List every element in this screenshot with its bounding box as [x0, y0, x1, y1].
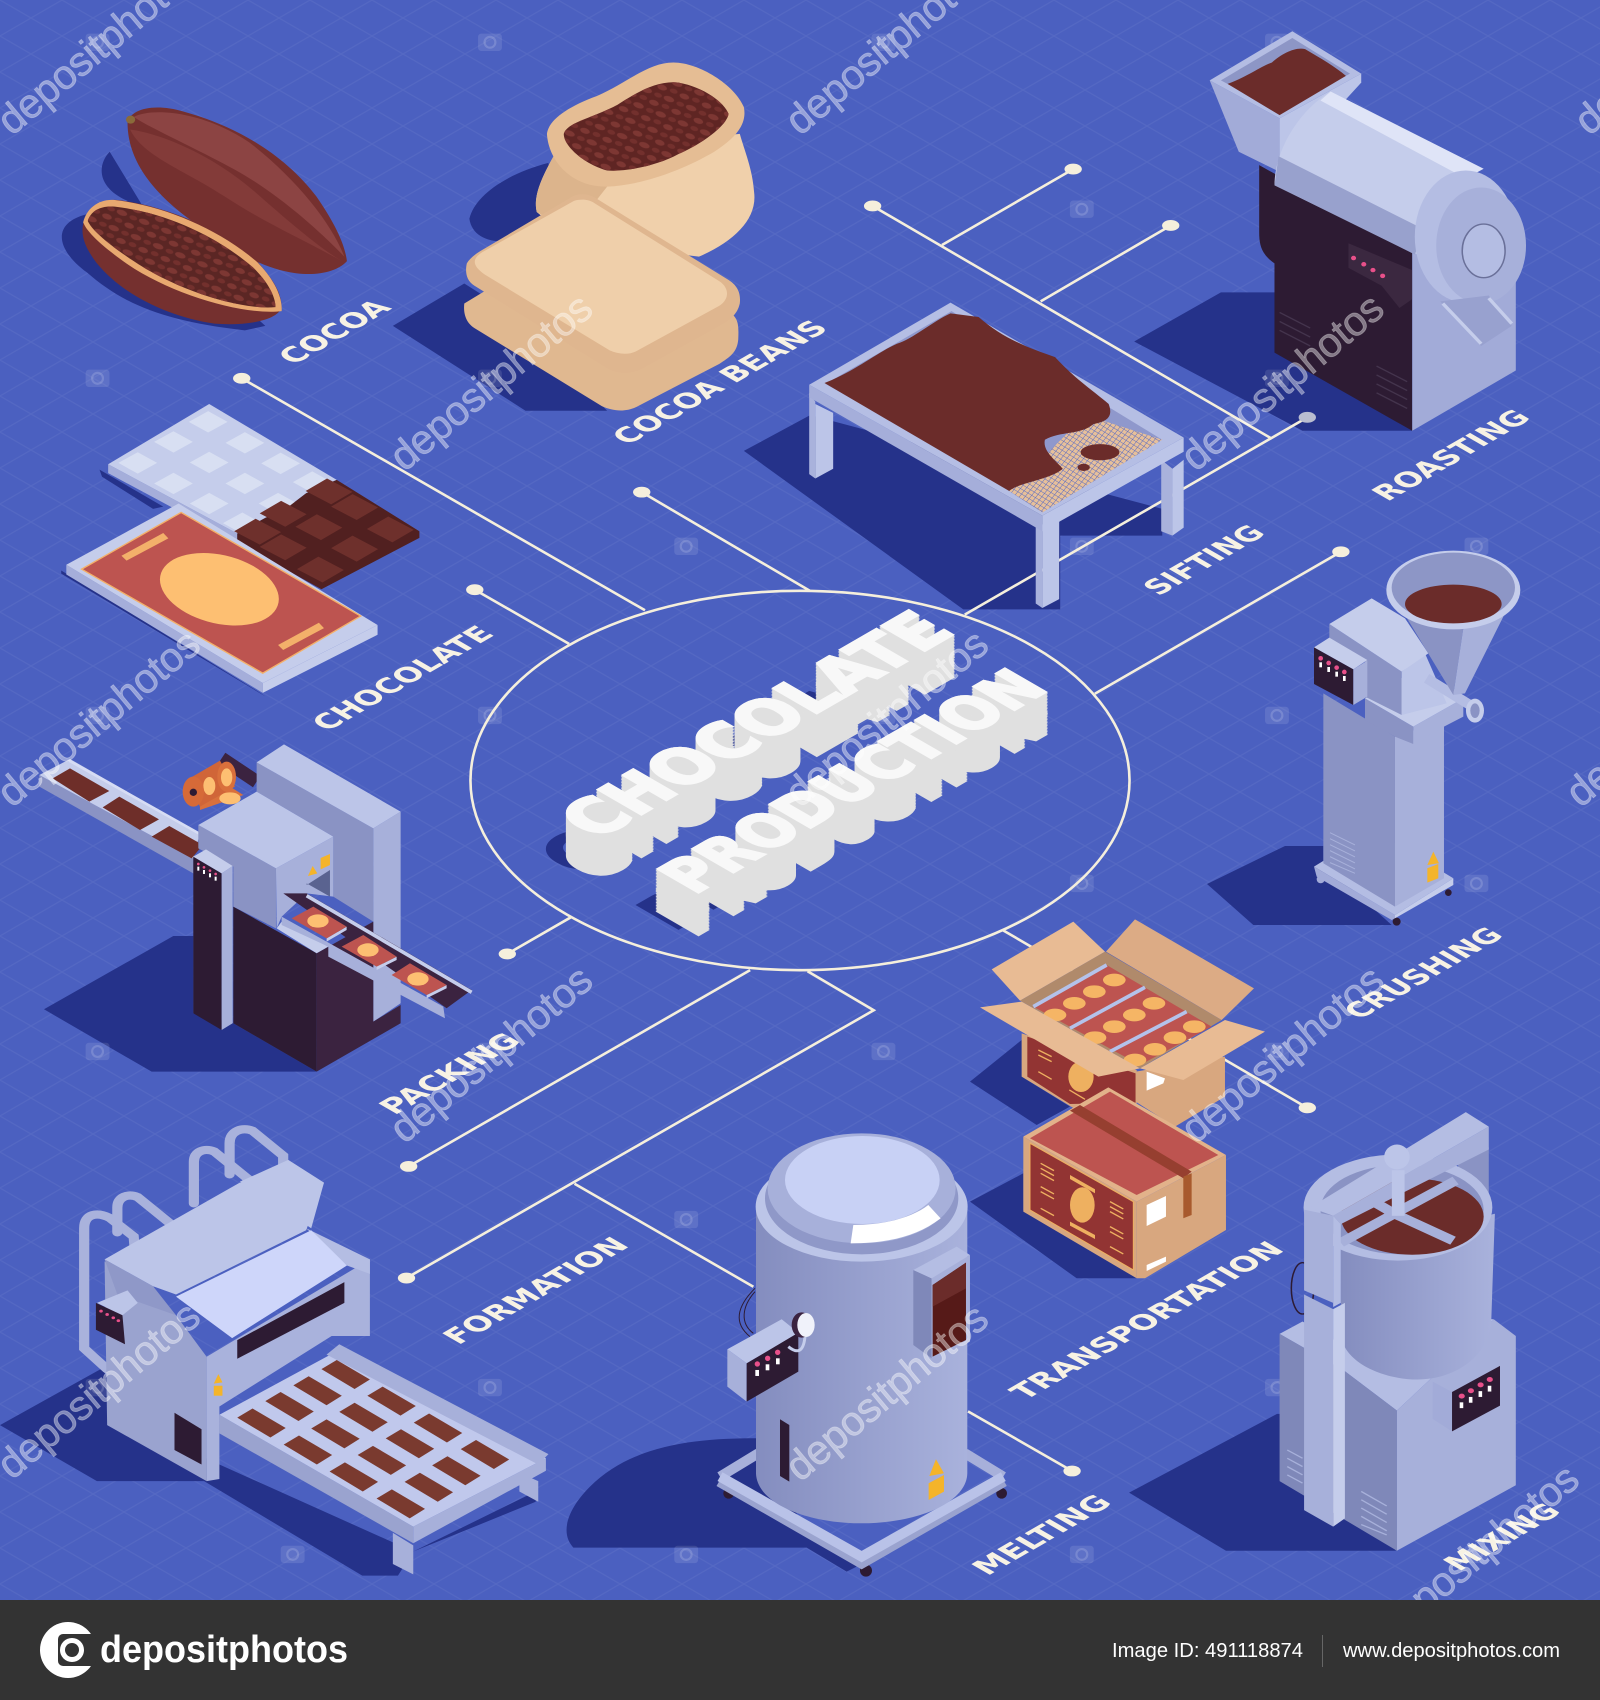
label: mixing: MIXING — [1436, 1499, 1568, 1575]
icon: melting tank — [720, 1133, 1007, 1577]
table tray with mesh — [809, 303, 1184, 531]
stock watermarks: depositphotos — [1172, 284, 1392, 480]
label: formation: FORMATION — [435, 1233, 636, 1349]
footer logo text: depositphotos — [100, 1629, 348, 1671]
central title: chocolate production: PRODUCTION — [644, 660, 1064, 903]
label: transportation: TRANSPORTATION — [1002, 1237, 1292, 1404]
website: www.depositphotos.com — [1342, 1640, 1560, 1662]
stock watermarks: depositphotos — [776, 1294, 997, 1490]
dark machine body — [233, 907, 401, 1072]
flowchart connector lines and central ring — [233, 164, 1350, 1476]
icon: transportation boxes — [980, 919, 1265, 1278]
tank body — [756, 1207, 967, 1523]
grinder base and wheels — [1314, 830, 1453, 926]
central title: chocolate production — [543, 601, 1064, 903]
wrapped chocolate bar — [66, 504, 378, 693]
icon: crushing machine — [1314, 551, 1520, 926]
infeed conveyor with bars — [39, 759, 200, 873]
grinder funnel — [1386, 551, 1520, 695]
machine body — [105, 1228, 370, 1481]
icon: chocolate bars — [66, 404, 419, 693]
grinder outlet pipe — [1427, 678, 1484, 723]
open cocoa pod with beans — [83, 200, 282, 324]
label: cocoa: COCOA — [270, 295, 399, 369]
mixer control panel — [1433, 1366, 1500, 1431]
grinder column — [1323, 693, 1444, 907]
warning signs — [929, 1459, 944, 1500]
icon: mixing machine — [1280, 1112, 1516, 1551]
mixer base — [1280, 1315, 1516, 1551]
label: roasting: ROASTING — [1364, 405, 1538, 505]
cables — [1291, 1263, 1314, 1314]
stock watermarks: depositphotos — [1367, 1455, 1588, 1650]
rear pillar — [1458, 1147, 1489, 1216]
conveyor table with bars — [219, 1344, 548, 1574]
label: cocoa beans: COCOA BEANS — [604, 315, 836, 449]
hopper and hood — [105, 1160, 347, 1338]
footer bar — [0, 1600, 1600, 1700]
roaster dark body — [1259, 165, 1516, 431]
roaster drum — [1274, 92, 1526, 304]
tank trolley frame — [720, 1453, 1007, 1577]
control column — [193, 849, 233, 1030]
unwrapped chocolate bar — [108, 404, 419, 589]
icon: packing machine — [39, 744, 472, 1072]
stock watermarks: depositphotos — [1172, 956, 1392, 1152]
closed stacked sacks — [464, 194, 740, 410]
closed box — [1023, 1087, 1226, 1278]
open box — [980, 919, 1265, 1127]
cast shadows of all objects — [0, 152, 1412, 1576]
stock watermarks: depositphotos — [381, 956, 601, 1152]
process labels — [270, 295, 1568, 1580]
mixer column and arch — [1304, 1112, 1489, 1527]
whole cocoa pod — [126, 108, 347, 274]
wrapper rolls — [183, 758, 257, 810]
decorative camera marks — [86, 34, 1488, 1563]
cocoa mass on sieve — [824, 313, 1119, 491]
label: packing: PACKING — [371, 1028, 528, 1119]
mixer tank — [1304, 1154, 1495, 1380]
icon: cocoa beans sacks — [464, 62, 754, 410]
icon: cocoa pods — [83, 108, 347, 324]
tank window — [913, 1247, 970, 1358]
grinder control panel — [1314, 638, 1367, 705]
tank control box and gauge — [727, 1312, 815, 1402]
tank lid — [756, 1133, 968, 1262]
pipes — [84, 1129, 283, 1369]
label: melting: MELTING — [964, 1490, 1119, 1580]
label: chocolate: CHOCOLATE — [304, 621, 501, 735]
icon: roasting machine — [1210, 31, 1526, 431]
icon: formation machine — [84, 1129, 548, 1574]
cables — [739, 1288, 755, 1337]
roaster chute — [1440, 296, 1512, 346]
footer logo icon — [40, 1622, 96, 1678]
stock watermarks: depositphotos — [776, 620, 997, 816]
central title: chocolate production: CHOCOLATE — [543, 601, 971, 849]
machine head — [198, 792, 333, 953]
icon: sifting table — [809, 303, 1184, 608]
label: crushing: CRUSHING — [1336, 923, 1511, 1024]
control panel — [96, 1290, 138, 1344]
table legs — [809, 393, 1184, 608]
roaster hopper — [1210, 31, 1361, 172]
back tower — [257, 744, 401, 1022]
tank slot — [780, 1419, 789, 1482]
image id: Image ID: 491118874 — [1112, 1640, 1303, 1662]
grinder shelf — [1365, 672, 1463, 744]
stock watermarks: depositphotos — [381, 284, 601, 480]
outfeed conveyor with packages — [282, 893, 472, 1018]
label: sifting: SIFTING — [1135, 520, 1273, 600]
grinder head — [1329, 598, 1447, 715]
open sack — [536, 62, 754, 257]
